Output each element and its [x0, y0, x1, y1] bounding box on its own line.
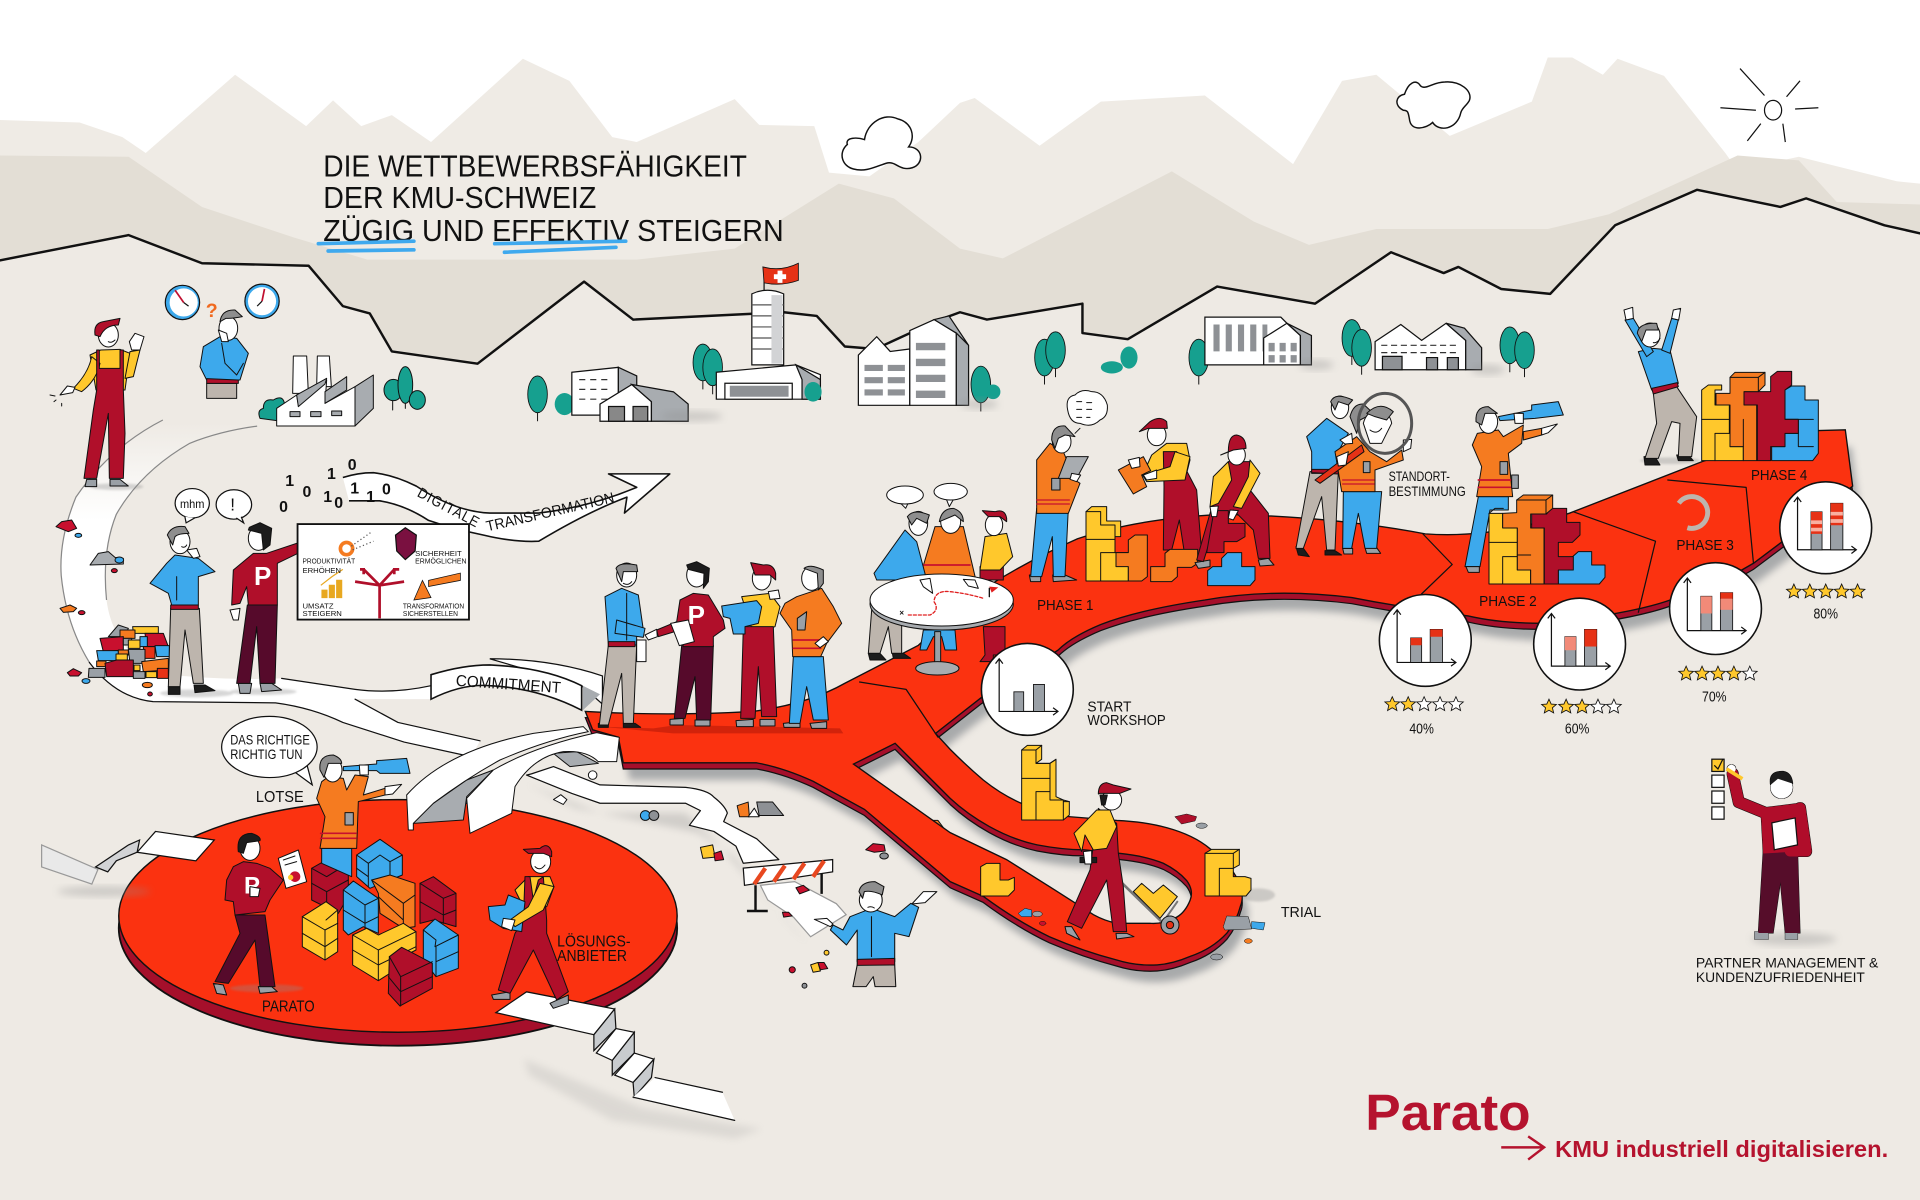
- icon: clock right: [245, 284, 279, 318]
- figure: solution provider: [488, 846, 568, 1008]
- figure: blue shirt man: [150, 526, 233, 697]
- jacket: [1472, 425, 1523, 497]
- speech bubble exclamation: !: [230, 495, 235, 515]
- middle mountain range: [0, 156, 1920, 490]
- hands on orange block: [1128, 457, 1157, 480]
- label: partner management: KUNDENZUFRIEDENHEIT: [1696, 969, 1865, 985]
- shoes of planner: [868, 653, 911, 660]
- stones near shrugging man: [789, 950, 829, 988]
- building: long hall with house: [1205, 317, 1333, 370]
- rating 60 percent: [1542, 699, 1621, 737]
- speech bubble left: [887, 486, 923, 508]
- shoes: [1644, 455, 1693, 465]
- pile of blocks: [88, 625, 169, 678]
- stack: tops: [1489, 495, 1553, 514]
- round table group: [868, 483, 1013, 675]
- shirt and arm: [1074, 810, 1117, 852]
- main red road: [585, 430, 1853, 965]
- tree right: [409, 391, 425, 409]
- arms: [1625, 318, 1678, 357]
- whiteboard: STEIGERN: [302, 609, 342, 618]
- clipboard: [1772, 818, 1798, 850]
- head: [1640, 323, 1660, 347]
- label: Lotse: LOTSE: [256, 789, 304, 806]
- carried blue block: [722, 601, 762, 634]
- binary digits: 1: [350, 480, 359, 497]
- stack: yellow: [1489, 513, 1531, 584]
- red legs of worker: [980, 627, 1005, 662]
- commitment banner: [431, 659, 602, 710]
- hands on table: [920, 578, 978, 593]
- speech bubble mhm: [175, 489, 209, 523]
- figure: man with gray trousers: [1296, 396, 1353, 557]
- stack: orange: [1503, 495, 1553, 584]
- stack: blue: [1772, 386, 1818, 461]
- building: apartment blocks: [858, 316, 1000, 411]
- cloud right: [1397, 82, 1470, 128]
- icon: red arrows: [355, 569, 404, 618]
- title: DER KMU-SCHWEIZ: [323, 181, 596, 215]
- iso blocks centre: [302, 839, 458, 1006]
- red sweater partner: [645, 562, 725, 726]
- bush: [259, 398, 287, 421]
- worker partner: [736, 563, 780, 727]
- foot: [1466, 567, 1479, 572]
- binary digits: 1: [366, 489, 375, 506]
- white stream: [527, 767, 846, 945]
- figure: worker with orange block: [1139, 418, 1202, 557]
- steps left: [42, 831, 214, 896]
- speech bubble exclamation: [216, 490, 252, 523]
- block shadow: [1242, 888, 1275, 902]
- sun: [1720, 69, 1818, 142]
- trolley: [1097, 858, 1179, 934]
- binary digits: 1: [285, 473, 294, 490]
- blue partner: [598, 563, 646, 727]
- orange planner: [920, 508, 977, 583]
- whiteboard: UMSATZ: [302, 602, 334, 611]
- tree left: [384, 379, 403, 410]
- radio: [1500, 462, 1518, 488]
- figure: tablet inspector: [1029, 426, 1088, 582]
- pointing arm: [1523, 428, 1542, 440]
- trousers: [1645, 387, 1697, 458]
- chart 80 percent: [1780, 482, 1872, 574]
- chimneys: [293, 356, 331, 393]
- belt: [1652, 383, 1678, 394]
- trial scene: [981, 745, 1275, 960]
- telescope: [1498, 402, 1563, 421]
- icon: productivity gear: [340, 531, 373, 555]
- label: Lösungsanbieter: ANBIETER: [557, 948, 627, 965]
- pointing hand: [1542, 424, 1557, 435]
- trees: [1035, 332, 1209, 384]
- red sweater partner: P: [688, 600, 705, 630]
- orange step block: [1151, 549, 1198, 582]
- icon: phase 3 loop arrow: [1679, 497, 1708, 528]
- speech bubble mhm: mhm: [180, 497, 204, 511]
- figure: thinking man: [200, 310, 248, 398]
- hands: [1624, 307, 1681, 320]
- stack: red: [1532, 508, 1580, 584]
- binary digits: 1: [327, 466, 336, 483]
- building: tower with Swiss flag: [693, 263, 822, 402]
- stack: yellow: [1702, 385, 1743, 461]
- rating 40 percent: 40%: [1409, 721, 1434, 737]
- figure: orange man with magnifier: [1315, 393, 1412, 554]
- rating 70 percent: 70%: [1702, 690, 1727, 706]
- factory: [259, 356, 425, 426]
- worker upper body: [980, 511, 1013, 580]
- table: [870, 574, 1013, 675]
- tree middle: [398, 367, 413, 408]
- figure: worker lifting block: [1195, 435, 1274, 568]
- stack: blue: [1558, 552, 1605, 584]
- label: phase 4: PHASE 4: [1751, 468, 1807, 484]
- whiteboard: SICHERHEIT: [415, 549, 462, 558]
- label: start workshop: WORKSHOP: [1087, 713, 1166, 729]
- whiteboard: SICHERSTELLEN: [403, 609, 458, 618]
- checklist: [1712, 759, 1724, 819]
- table: ×: [899, 609, 904, 618]
- yellow block lower: [981, 863, 1014, 896]
- speech bubble Das richtige richtig tun: DAS RICHTIGE: [230, 732, 310, 747]
- yellow block right: [1205, 849, 1251, 896]
- figure: man with telescope and phase 2 stack: [1465, 402, 1605, 584]
- gray legs of planner: [868, 610, 902, 653]
- barrier: [743, 860, 833, 912]
- phase 1 scene: [1029, 391, 1412, 586]
- figure: Parato consultant: P: [254, 561, 271, 591]
- second arch: [467, 733, 619, 833]
- label: trial: TRIAL: [1281, 905, 1321, 921]
- rating 40 percent: [1385, 697, 1463, 737]
- underside shadow: [553, 752, 598, 767]
- figure: Parato on platform: [213, 833, 307, 995]
- figure: Parato on platform: P: [244, 872, 260, 899]
- label: start workshop: START: [1087, 699, 1131, 715]
- rating 60 percent: 60%: [1565, 721, 1589, 737]
- whiteboard: TRANSFORMATION: [403, 602, 464, 611]
- chart 70 percent: [1670, 563, 1761, 654]
- title: DIE WETTBEWERBSFÄHIGKEIT: [323, 149, 747, 183]
- figure: Lotse with telescope: [317, 755, 410, 877]
- rating 70 percent: [1679, 666, 1757, 706]
- speech bubble Das richtige richtig tun: RICHTIG TUN: [230, 747, 302, 762]
- label: Standort-Bestimmung: BESTIMMUNG: [1389, 484, 1466, 499]
- logo Parato: Parato: [1365, 1083, 1531, 1141]
- label: partner management: [1696, 954, 1879, 985]
- figure group: four partners handshake: [598, 562, 843, 733]
- start workshop chart: [981, 643, 1073, 735]
- speech bubble Das richtige richtig tun: [222, 716, 317, 785]
- whiteboard: ERHÖHEN: [302, 566, 341, 575]
- title: [318, 149, 784, 252]
- rating 80 percent: [1787, 584, 1865, 622]
- figure: shrugging man: [814, 882, 937, 987]
- bridge: [407, 727, 619, 833]
- label: Lösungsanbieter: LÖSUNGS-: [557, 933, 631, 951]
- figure: cheering man and phase 4 stack: [1624, 307, 1818, 465]
- figure: partner manager: [1712, 759, 1837, 945]
- digital transformation arrow: DIGITALE: [414, 485, 483, 532]
- bridge stairs: [413, 770, 493, 823]
- orange block carried: [1118, 457, 1151, 494]
- red block lifted: [1207, 511, 1245, 553]
- labels on platform: [256, 789, 631, 1015]
- label: partner management: PARTNER MANAGEMENT &: [1696, 954, 1879, 970]
- factory body: [277, 380, 355, 426]
- pants: [1465, 497, 1508, 567]
- digital transformation arrow: TRANSFORMATION: [485, 490, 616, 535]
- feet: [1065, 927, 1134, 940]
- white journey path: [61, 420, 480, 757]
- cloud left: [842, 117, 921, 170]
- rating 80 percent: 80%: [1813, 606, 1838, 622]
- chart 60 percent: [1534, 598, 1626, 690]
- binary digits: [279, 457, 391, 516]
- icon: question mark: ?: [206, 300, 218, 322]
- head: [1479, 410, 1498, 433]
- whiteboard: [298, 524, 469, 620]
- red platform disc: [119, 800, 677, 1046]
- stack: orange: [1716, 372, 1765, 461]
- overall: [1067, 808, 1127, 932]
- shadow: [1640, 457, 1700, 464]
- speech bubble right: [934, 483, 967, 507]
- steps bottom: [496, 992, 762, 1139]
- hand and grip: [1080, 857, 1097, 863]
- arrow to tagline: [1501, 1136, 1544, 1160]
- label: Parato: PARATO: [262, 998, 315, 1015]
- orange partner: [768, 566, 842, 728]
- first arch: [407, 727, 588, 830]
- icon: shield: [396, 528, 416, 560]
- yellow orange blocks: [1086, 507, 1147, 581]
- label: phase 1: PHASE 1: [1037, 598, 1093, 614]
- jacket stripes: [1478, 480, 1512, 487]
- title: ZÜGIG UND EFFEKTIV STEIGERN: [323, 214, 784, 248]
- label: Lösungsanbieter: [557, 933, 631, 965]
- whiteboard: ERMÖGLICHEN: [415, 556, 467, 565]
- stones: [1018, 814, 1265, 960]
- figure: worker explaining: [50, 318, 144, 490]
- factory roofs and side: [297, 375, 373, 426]
- binary digits: 0: [348, 457, 357, 474]
- commitment banner: COMMITMENT: [455, 673, 562, 697]
- stones by left path: [56, 520, 152, 696]
- binary digits: 0: [302, 484, 311, 501]
- shadow on road: [600, 725, 843, 733]
- blue planner: [874, 511, 929, 580]
- hand on telescope: [1514, 413, 1523, 423]
- label: start workshop: [1087, 699, 1166, 729]
- binary digits: 0: [382, 482, 391, 499]
- whiteboard: PRODUKTIVITÄT: [302, 556, 355, 565]
- icon: telescope viewer: [414, 573, 460, 600]
- label: Standort-Bestimmung: [1389, 469, 1466, 499]
- digital transformation arrow: [343, 473, 670, 541]
- blue legs of lotse: [920, 630, 957, 650]
- red road shadow: [591, 447, 1859, 982]
- red road rim: [585, 436, 1853, 971]
- binary digits: 0: [279, 499, 288, 516]
- icon: growth chart: [321, 569, 343, 598]
- yellow block upper: [1022, 745, 1069, 820]
- building: twin gabled houses: [1342, 320, 1534, 377]
- label: phase 2: PHASE 2: [1479, 594, 1537, 610]
- blue tetris block: [1208, 553, 1255, 586]
- icon: clock left: [165, 285, 200, 320]
- pen: [1727, 769, 1742, 779]
- label: phase 3: PHASE 3: [1676, 538, 1734, 554]
- binary digits: 1: [323, 489, 332, 506]
- figure: Parato consultant: [230, 523, 323, 695]
- thought cloud: [1067, 391, 1107, 433]
- stones by stream: [553, 771, 945, 917]
- chart 40 percent: [1379, 594, 1471, 686]
- tagline: KMU industriell digitalisieren.: [1555, 1136, 1888, 1162]
- shirt: [1638, 348, 1678, 390]
- label: Standort-Bestimmung: STANDORT-: [1389, 469, 1450, 484]
- head: [1102, 790, 1122, 810]
- binary digits: 0: [334, 495, 343, 512]
- building: office and hall: [528, 367, 722, 421]
- hands on red block: [1210, 506, 1238, 520]
- factory windows: [290, 411, 342, 417]
- stack: red: [1744, 371, 1798, 461]
- back mountain range: [0, 58, 1920, 490]
